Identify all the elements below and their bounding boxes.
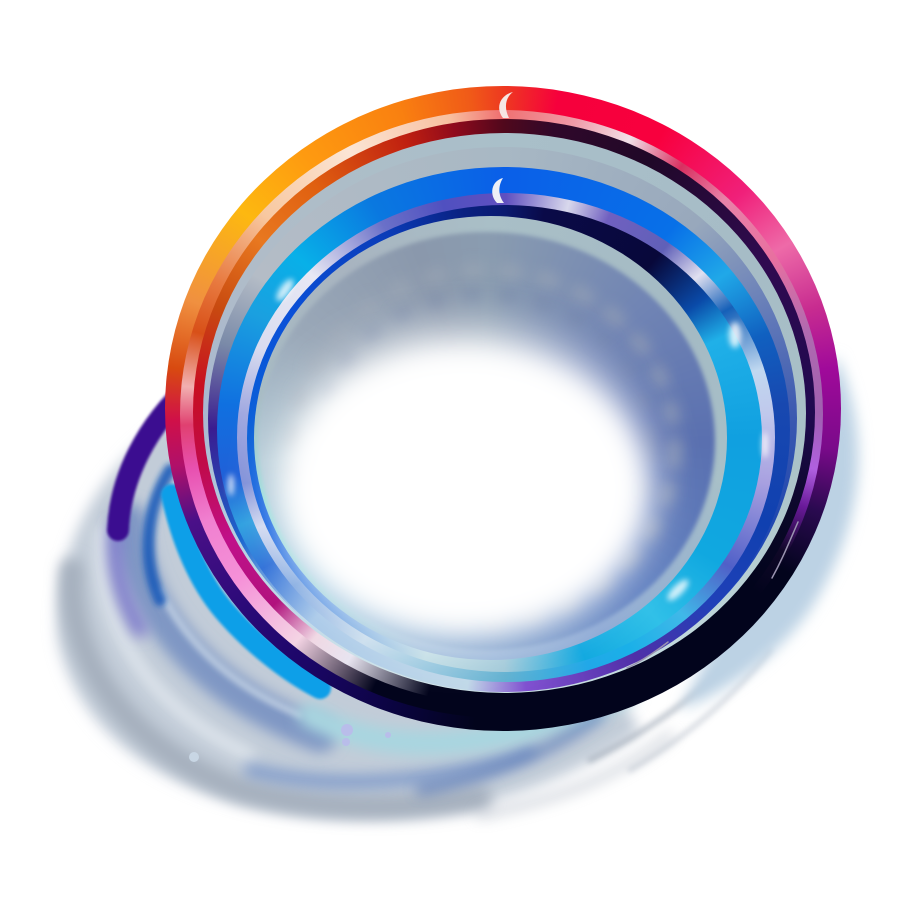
crescent highlight on inner ring [492,178,504,203]
blue back strand [149,470,170,600]
white centre core [289,356,641,624]
ghost body: grey-blue haze lower left [57,420,770,818]
purple back arc fading [115,530,140,630]
cyan back arc [172,495,320,688]
inner ring: outer band [217,167,790,692]
interior: blue-grey funnel [258,232,715,650]
interior: pale rim [254,216,727,660]
inner ring: lilac middle band [237,193,775,682]
interior mottled streaks [295,270,675,620]
outer ring: dark inner band [193,119,815,705]
white glints on cyan band [228,276,768,603]
outer ring: outer band [165,86,841,731]
glints on black band [627,522,798,668]
inner ring: navy and cyan inner band [247,205,762,672]
outer ring: pale middle band [180,110,823,718]
gap band: blue-grey shading [208,147,797,690]
white centre of the funnel [283,333,647,637]
gap band: pale grey [203,133,806,693]
light dots [189,724,391,762]
crescent highlight on outer ring [499,92,513,118]
ghost haze right side [680,355,858,710]
dark purple back arc [118,382,195,530]
